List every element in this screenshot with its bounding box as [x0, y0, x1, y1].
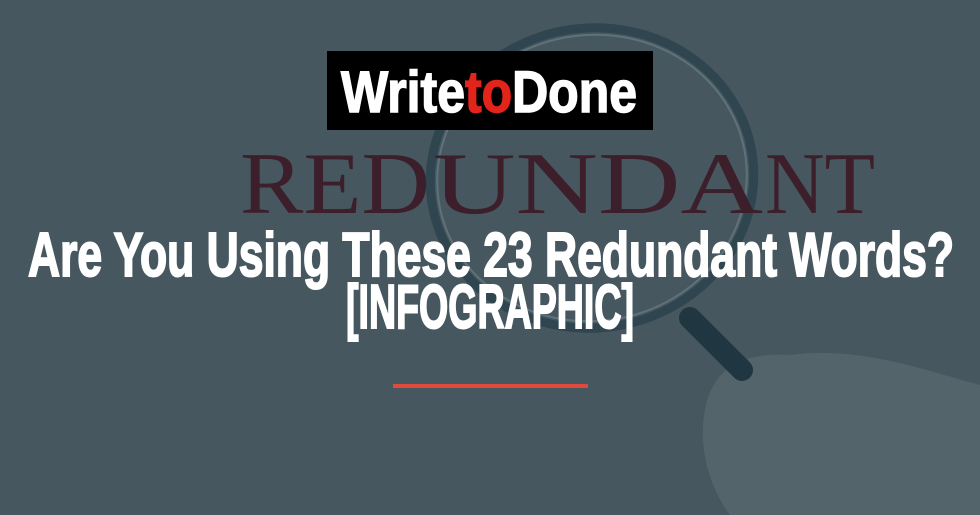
background word: redundant: NT	[765, 136, 875, 233]
logo: WritetoDone: WritetoDone	[341, 60, 637, 125]
background word: redundant: UNDA	[433, 136, 763, 233]
accent line	[393, 384, 588, 388]
title: [INFOGRAPHIC]	[346, 273, 634, 342]
title	[28, 221, 954, 342]
background word: redundant: RED	[240, 136, 430, 233]
background word: redundant	[240, 136, 875, 233]
hand	[703, 353, 980, 515]
icon: magnifying glass	[411, 7, 980, 515]
